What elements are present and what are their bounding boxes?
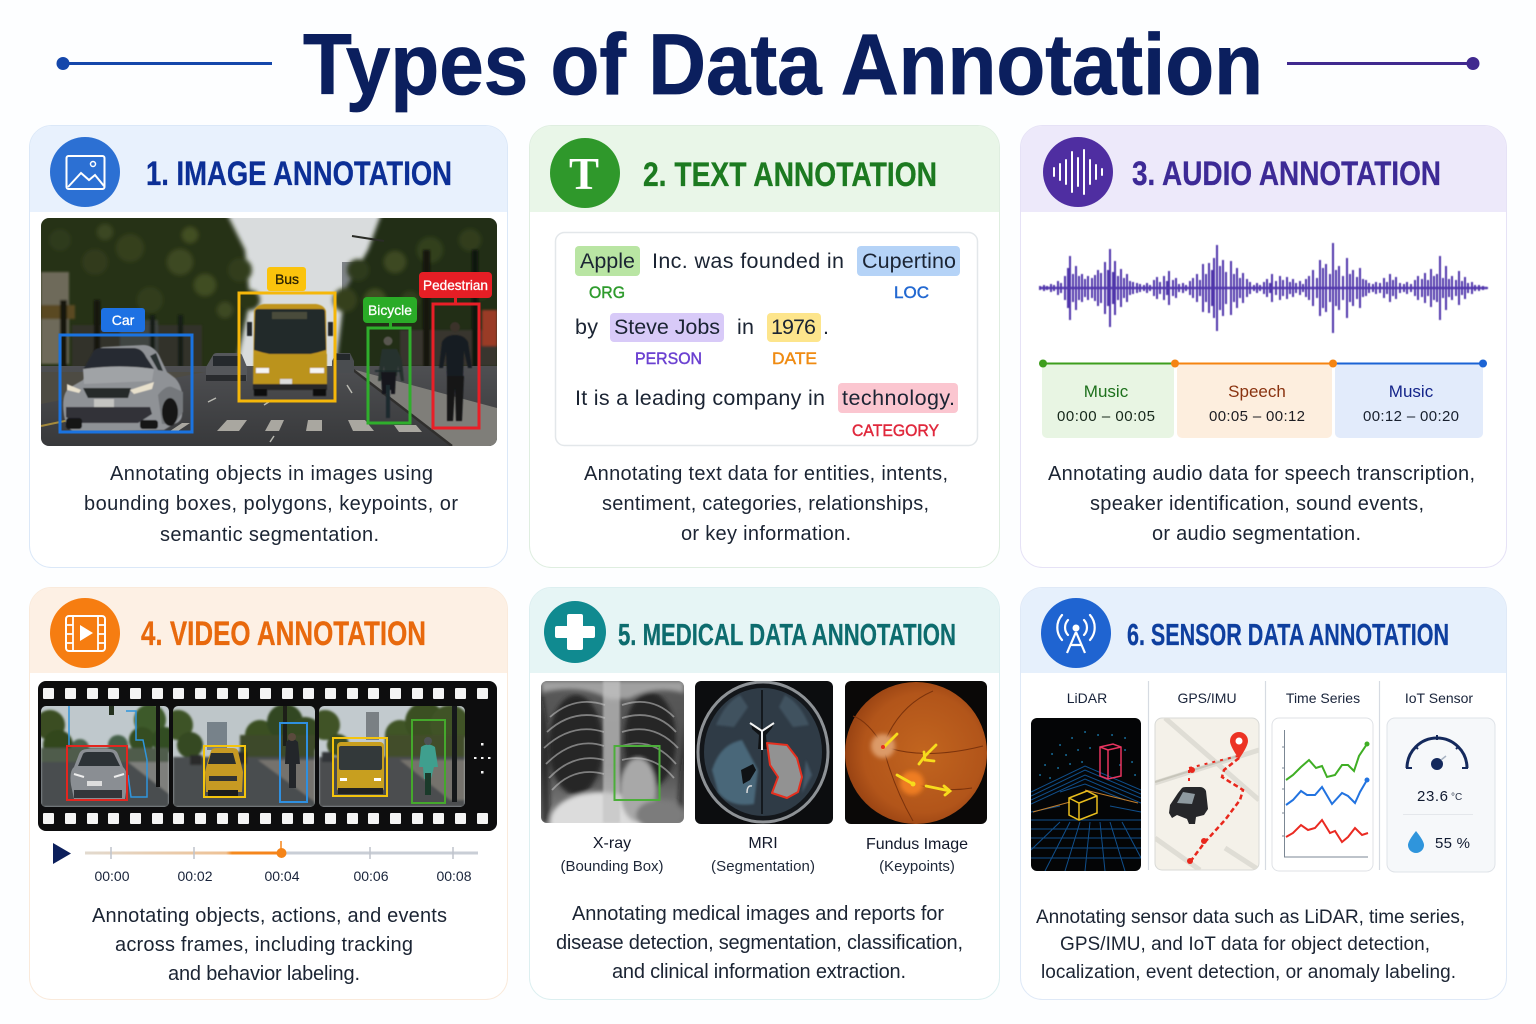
icon: letter T: T [569,149,599,199]
entity: Apple ORG: Apple [580,249,635,273]
bounding box: pedestrian: Pedestrian [423,277,488,293]
entity: technology CATEGORY [838,383,958,440]
cyclist [375,336,404,418]
GPS/IMU column [1155,690,1259,870]
title accent left [56,57,272,70]
entity: Steve Jobs PERSON [610,313,724,368]
segment: speech 00:05-00:12 [1171,360,1333,438]
LiDAR column: LiDAR [1067,690,1107,706]
panel: video annotation [30,588,508,1000]
description: medical: disease detection, segmentation, classification, [556,932,963,954]
entity: technology CATEGORY: CATEGORY [852,421,939,440]
entity: Steve Jobs PERSON: Steve Jobs [614,315,720,339]
fundus image [845,681,987,824]
heading: audio annotation: 3. AUDIO ANNOTATION [1132,155,1441,193]
entity: 1976 DATE: 1976 [771,315,816,339]
entity: 1976 DATE: DATE [772,349,817,368]
description: audio annotation: speaker identification, sound events, [1090,493,1424,515]
description: sensor: GPS/IMU, and IoT data for object detection, [1060,934,1430,955]
audio waveform [1040,243,1487,333]
segment: music 00:12-00:20: 00:12 – 00:20 [1363,408,1459,425]
entity: Cupertino LOC: Cupertino [862,249,956,273]
video timeline: 00:02 [177,868,213,884]
description: image annotation: Annotating objects in images using [110,463,433,485]
frame 1: car [41,706,169,807]
description: image annotation: semantic segmentation. [160,524,379,546]
caption: MRI [711,835,815,875]
humidity reading: 55 % [1435,835,1470,852]
heading: medical data annotation: 5. MEDICAL DATA ANNOTATION [618,617,956,652]
icon: antenna [1041,598,1111,668]
play button [53,843,71,864]
entity: 1976 DATE: . [823,315,829,339]
annotated street photo [35,212,505,446]
caption: MRI: (Segmentation) [711,858,815,875]
caption: x-ray: X-ray [593,835,631,852]
segment: music 00:00-00:05 [1039,360,1175,438]
caption: x-ray [560,835,664,875]
icon: video [50,598,120,668]
icon: sound wave [1043,137,1113,207]
description: medical [556,903,963,983]
caption: fundus [866,836,968,875]
frame 3: bus and cyclist [319,706,465,807]
description: text annotation: or key information. [681,523,851,545]
bounding box: pedestrian [419,272,492,428]
caption: fundus: (Keypoints) [879,858,955,875]
car icon [1169,787,1208,824]
sentence text line 1: Inc. was founded in [652,249,844,273]
gauge [1406,735,1468,770]
heading: video annotation: 4. VIDEO ANNOTATION [141,615,426,653]
bounding box: bus [239,267,335,401]
description: video annotation: Annotating objects, actions, and events [92,905,447,927]
segment: music 00:00-00:05: 00:00 – 00:05 [1057,408,1155,425]
entity: technology CATEGORY: technology. [842,386,955,410]
entity: Apple ORG: ORG [589,283,625,302]
GPS/IMU column: GPS/IMU [1177,690,1237,706]
LiDAR column [1031,690,1141,871]
description: medical: and clinical information extraction. [612,961,906,983]
description: audio annotation: Annotating audio data for speech transcription, [1048,463,1475,485]
entity: Apple ORG [575,246,640,302]
x-ray image [541,681,684,823]
segment: music 00:12-00:20: Music [1389,382,1434,401]
description: text annotation: Annotating text data for entities, intents, [584,463,948,485]
strip dots [474,743,490,774]
film strip [35,681,497,831]
yellow bus [247,304,333,396]
video timeline: 00:08 [436,868,472,884]
MRI image [695,681,833,824]
description: sensor: localization, event detection, or anomaly labeling. [1041,962,1456,983]
description: text annotation [584,463,948,545]
3D box: yellow [1069,791,1097,820]
icon: letter T [550,138,620,208]
entity: Steve Jobs PERSON: PERSON [635,349,702,368]
panel: medical data annotation [530,588,1000,1000]
description: image annotation: bounding boxes, polygons, keypoints, or [84,493,458,515]
panel: audio annotation [1020,126,1506,568]
caption: x-ray: (Bounding Box) [560,858,664,875]
sentence text line 3: It is a leading company in [575,386,825,410]
bounding box: car: Car [112,312,135,328]
bounding box: bus: Bus [275,271,299,287]
heading: image annotation: 1. IMAGE ANNOTATION [146,155,452,193]
panel: sensor data annotation [1020,588,1506,1000]
sentence text in: in [737,315,754,339]
description: video annotation: and behavior labeling. [168,963,360,985]
time series column: Time Series [1286,690,1360,706]
description: video annotation: across frames, including tracking [115,934,413,956]
description: sensor: Annotating sensor data such as LiDAR, time series, [1036,907,1465,928]
entity: Cupertino LOC: LOC [894,283,929,302]
temperature reading: 23.6 [1417,788,1448,805]
description: audio annotation: or audio segmentation. [1152,523,1361,545]
description: medical: Annotating medical images and reports for [572,903,944,925]
heading: text annotation: 2. TEXT ANNOTATION [643,156,937,194]
description: audio annotation [1048,463,1475,545]
segment: music 00:12-00:20 [1329,360,1487,438]
description: video annotation [92,905,447,985]
caption: MRI: MRI [748,835,778,852]
title: Types of Data Annotation [303,17,1263,113]
sentence text by: by [575,315,598,339]
IoT sensor column [1387,690,1495,872]
video timeline: 00:04 [264,868,300,884]
pedestrian [439,322,472,421]
location pin [1230,732,1248,759]
segment: speech 00:05-00:12: Speech [1228,382,1286,401]
description: image annotation [84,463,458,546]
humidity icon [1408,831,1424,853]
icon: image [50,137,120,207]
panel: text annotation [530,126,1000,568]
distant cars [206,353,354,381]
time series column [1272,690,1373,871]
bounding box: bicycle [363,297,417,423]
bounding box: bicycle: Bicycle [368,302,412,318]
icon: medical cross [544,601,606,663]
IoT sensor column: IoT Sensor [1405,690,1473,706]
silver car [63,345,183,432]
video timeline: 00:00 [94,868,130,884]
annotated sentence box [556,232,978,446]
description: text annotation: sentiment, categories, relationships, [602,493,929,515]
title accent right [1287,57,1480,70]
frame 2: taxi and pedestrian [173,706,315,807]
segment: speech 00:05-00:12: 00:05 – 00:12 [1209,408,1305,425]
panel: image annotation [30,126,508,568]
video timeline [53,841,478,884]
description: sensor [1036,907,1465,983]
caption: fundus: Fundus Image [866,836,968,853]
bounding box: car [60,308,192,432]
video timeline: 00:06 [353,868,389,884]
entity: Cupertino LOC [857,246,960,302]
3D box: red [1100,744,1121,779]
entity: 1976 DATE [767,313,829,368]
temperature unit: °C [1451,792,1462,803]
segment: music 00:00-00:05: Music [1084,382,1129,401]
